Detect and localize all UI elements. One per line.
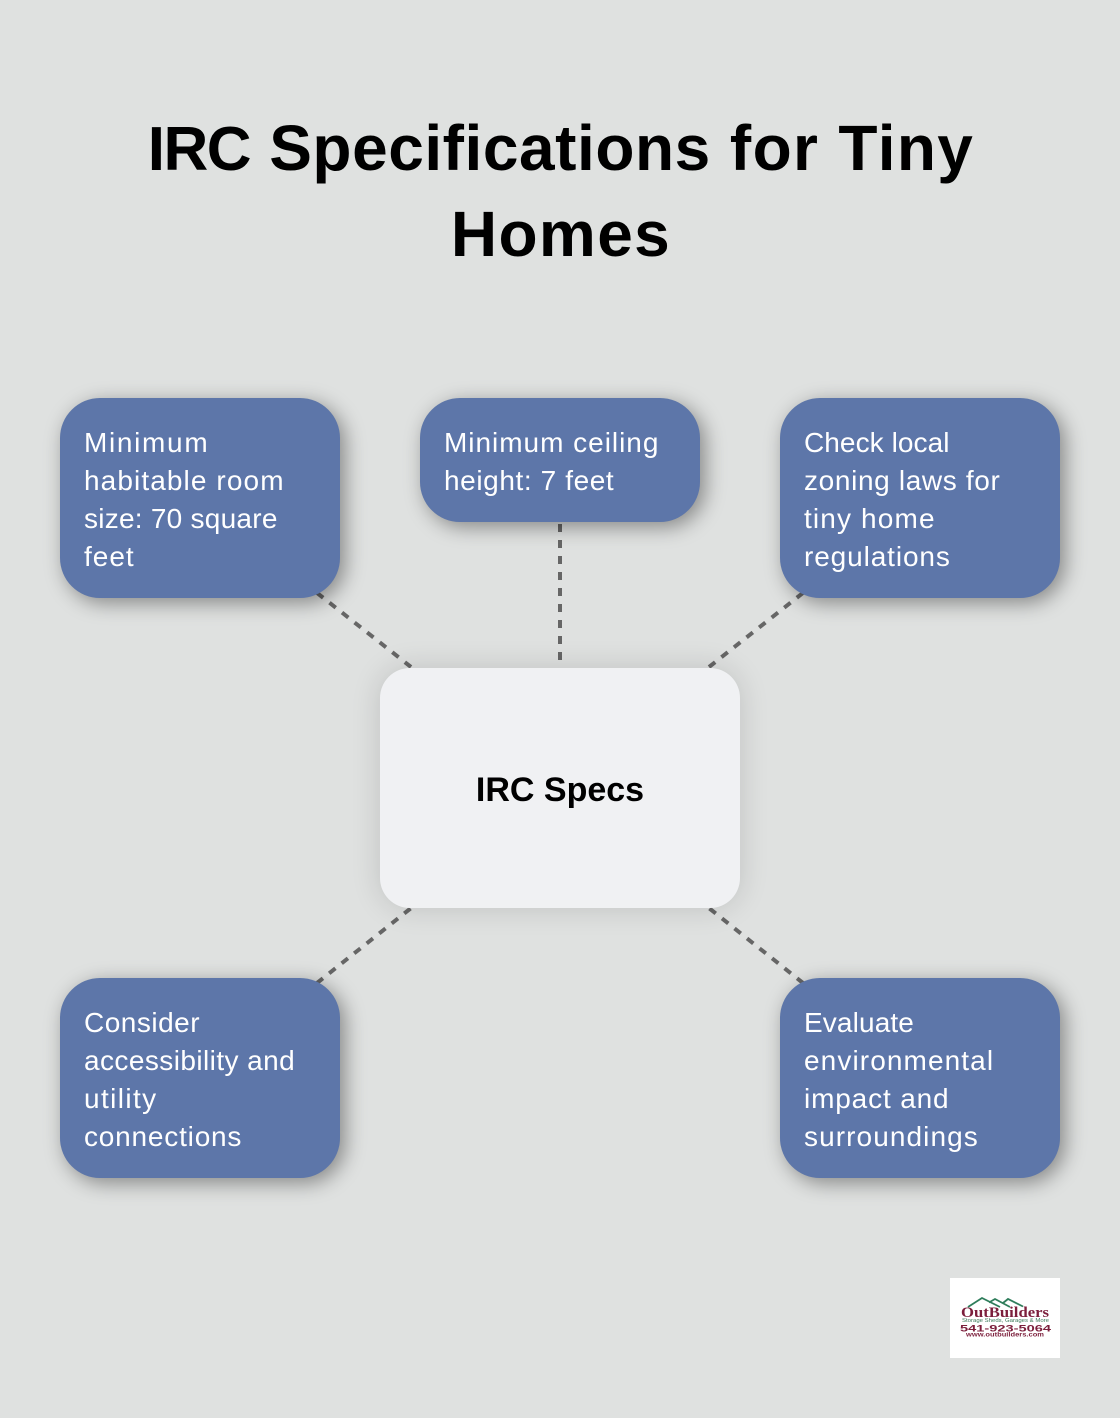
box: environmental impact bbox=[780, 978, 1060, 1178]
box: minimum room size: size: 70 square bbox=[84, 503, 278, 534]
box: minimum room size: feet bbox=[84, 541, 135, 572]
title bbox=[148, 112, 974, 270]
box: zoning laws: tiny home bbox=[804, 503, 936, 534]
box: accessibility and utilities: connections bbox=[84, 1121, 242, 1152]
title: Homes bbox=[451, 198, 671, 270]
box: environmental impact: Evaluate bbox=[804, 1007, 914, 1038]
box: accessibility and utilities: utility bbox=[84, 1083, 158, 1114]
box: minimum room size: Minimum bbox=[84, 427, 209, 458]
box: environmental impact: environmental bbox=[804, 1045, 994, 1076]
box: zoning laws: regulations bbox=[804, 541, 951, 572]
box: minimum ceiling height: height: 7 feet bbox=[444, 465, 614, 496]
logo: OutBuilders: Storage Sheds, Garages & More bbox=[962, 1318, 1049, 1324]
box: accessibility and utilities bbox=[60, 978, 340, 1178]
box: zoning laws: Check local bbox=[804, 427, 950, 458]
box: minimum ceiling height bbox=[420, 398, 700, 522]
box: zoning laws: zoning laws for bbox=[804, 465, 1001, 496]
logo: OutBuilders bbox=[950, 1278, 1060, 1358]
box: zoning laws bbox=[780, 398, 1060, 598]
box: environmental impact: surroundings bbox=[804, 1121, 979, 1152]
box: minimum ceiling height: Minimum ceiling bbox=[444, 427, 659, 458]
box: minimum room size bbox=[60, 398, 340, 598]
logo: OutBuilders: www.outbuilders.com bbox=[965, 1332, 1044, 1338]
title: IRC Specifications for Tiny bbox=[148, 112, 974, 184]
logo: OutBuilders: OutBuilders bbox=[961, 1305, 1049, 1321]
box: environmental impact: impact and bbox=[804, 1083, 949, 1114]
center node: IRC Specs: IRC Specs bbox=[476, 771, 644, 809]
logo: OutBuilders: 541-923-5064 bbox=[960, 1324, 1051, 1334]
box: minimum room size: habitable room bbox=[84, 465, 285, 496]
box: accessibility and utilities: Consider bbox=[84, 1007, 200, 1038]
center node: IRC Specs bbox=[380, 668, 740, 908]
box: accessibility and utilities: accessibility and bbox=[84, 1045, 295, 1076]
